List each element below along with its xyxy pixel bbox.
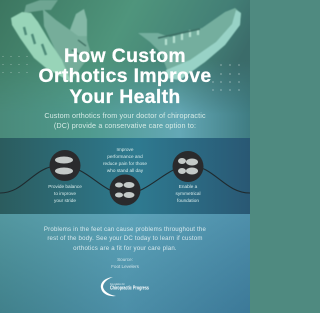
logo: Foundation for xyxy=(110,283,125,286)
wave and circles xyxy=(0,138,250,214)
intro text xyxy=(44,111,206,130)
benefit: balance: Provide balance xyxy=(48,184,82,189)
title: Orthotics Improve xyxy=(39,65,211,87)
closing text: Problems in the feet can cause problems throughout the xyxy=(44,226,206,232)
source: Foot Levelers xyxy=(111,264,139,269)
icon: left shoe xyxy=(10,0,90,82)
benefit: balance xyxy=(48,184,82,203)
benefit: foundation xyxy=(175,184,200,203)
intro text: (DC) provide a conservative care option to: xyxy=(54,121,196,130)
benefit: foundation: Enable a xyxy=(179,184,197,189)
benefit: performance xyxy=(103,147,147,173)
logo xyxy=(100,277,149,296)
title xyxy=(39,44,211,108)
benefit: foundation: foundation xyxy=(177,198,199,203)
benefit: performance: Improve xyxy=(117,147,133,152)
benefit: performance: performance and xyxy=(107,154,143,159)
benefit: balance: your stride xyxy=(54,198,76,203)
intro text: Custom orthotics from your doctor of chiropractic xyxy=(44,111,206,120)
title: Your Health xyxy=(69,86,181,108)
panel: benefits band xyxy=(0,138,250,214)
title: How Custom xyxy=(64,44,186,66)
background xyxy=(0,0,250,313)
benefit: performance: who stand all day xyxy=(107,168,143,173)
benefit: performance: reduce pain for those xyxy=(103,161,147,166)
closing text: rest of the body. See your DC today to learn if custom xyxy=(47,235,203,242)
source xyxy=(111,256,139,269)
benefit: balance: to improve xyxy=(54,191,76,196)
dot pattern xyxy=(2,56,240,91)
benefit: foundation: symmetrical xyxy=(175,191,200,196)
source: Source: xyxy=(117,256,133,262)
closing text xyxy=(44,226,206,252)
icon: right shoe xyxy=(138,8,242,80)
closing text: orthotics are a fit for your care plan. xyxy=(73,244,177,252)
